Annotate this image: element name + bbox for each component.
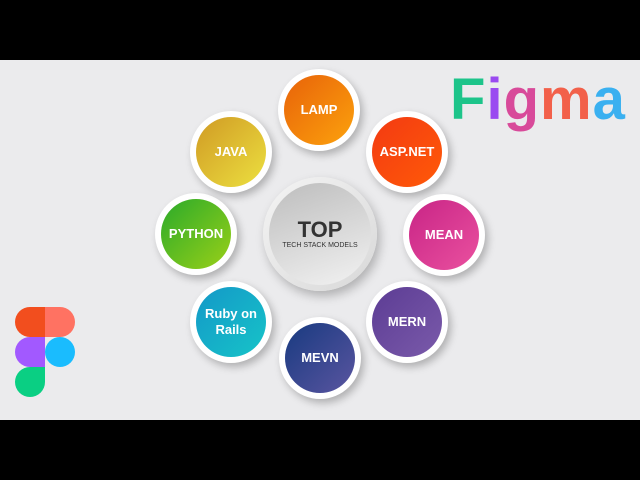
- Figma wordmark: Figma: [450, 67, 626, 132]
- circle: Ruby on Rails: [190, 281, 272, 363]
- circle: Ruby on Rails: Rails: [215, 322, 247, 337]
- Figma logo icon: [15, 307, 75, 397]
- circle: LAMP: [278, 69, 360, 151]
- circle: MEAN: MEAN: [425, 227, 463, 242]
- center text: TOP: [298, 217, 342, 242]
- circle: MEVN: MEVN: [301, 350, 339, 365]
- center text: TECH STACK MODELS: [282, 242, 358, 249]
- circle: MEAN: [403, 194, 485, 276]
- circle: PYTHON: PYTHON: [169, 226, 223, 241]
- circle: MERN: [366, 281, 448, 363]
- circle: Ruby on Rails: Ruby on: [205, 306, 257, 321]
- center text: [269, 183, 371, 285]
- circle: JAVA: JAVA: [215, 144, 247, 159]
- circle: LAMP: LAMP: [301, 102, 337, 117]
- circle: MERN: MERN: [388, 314, 426, 329]
- circle: MEVN: [279, 317, 361, 399]
- circle: ASP.NET: [366, 111, 448, 193]
- circle: JAVA: [190, 111, 272, 193]
- center circle: [263, 177, 377, 291]
- circle: ASP.NET: ASP.NET: [380, 144, 434, 159]
- circle: PYTHON: [155, 193, 237, 275]
